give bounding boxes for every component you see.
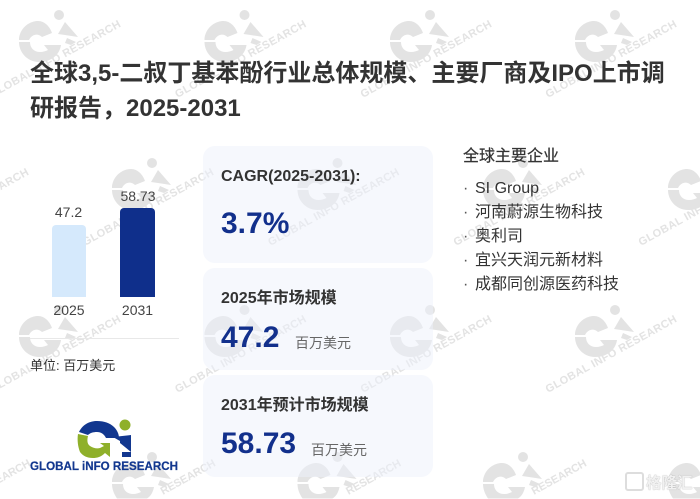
bar chart: [30, 188, 179, 339]
logo mark: blue arc: [79, 421, 119, 438]
list heading: 全球主要企业: [463, 148, 559, 165]
bar 2031: [120, 208, 155, 297]
company 2: ·: [463, 204, 468, 221]
logo text: GLOBAL iNFO RESEARCH: [30, 459, 178, 473]
watermark pattern: RESEARCH: [530, 458, 589, 498]
company 1: SI Group: [475, 180, 539, 197]
title: 全球3,5-二叔丁基苯酚行业总体规模、主要厂商及IPO上市调研报告，2025-2031: [30, 60, 665, 122]
watermark pattern: GLOBAL INFO RESEARCH: [359, 18, 494, 101]
CAGR value: 3.7%: [221, 207, 289, 240]
company 5: ·: [463, 276, 468, 293]
2031 unit: 百万美元: [311, 442, 367, 458]
panel: 2031 forecast market size: [203, 375, 433, 477]
watermark pattern: GLOBAL INFO RESEARCH: [266, 166, 401, 249]
value label 2025: 47.2: [55, 204, 82, 220]
source badge: 格隆汇: 格隆汇: [646, 475, 693, 492]
watermark pattern: GLOBAL INFO RESEARCH: [173, 18, 308, 101]
watermark pattern: GLOBAL INFO RESEARCH: [544, 18, 679, 101]
watermark pattern: GLOBAL INFO RESEARCH: [359, 313, 494, 396]
unit note: 单位: 百万美元: [30, 358, 115, 373]
company 4: ·: [463, 252, 468, 269]
watermark pattern: GLOBAL INFO RESEARCH: [544, 313, 679, 396]
company 4: 宜兴天润元新材料: [475, 252, 603, 269]
year label 2031: 2031: [122, 302, 153, 318]
logo: Global Info Research: [30, 420, 178, 473]
watermark pattern: RESEARCH: [344, 458, 403, 498]
company 3: ·: [463, 228, 468, 245]
panel: 2025 market size: [203, 268, 433, 370]
company 2: 河南蔚源生物科技: [475, 204, 603, 221]
CAGR label: CAGR(2025-2031):: [221, 168, 361, 185]
logo mark: green arc: [78, 434, 110, 458]
company list: [463, 147, 619, 293]
watermark pattern: RESEARCH: [159, 458, 218, 498]
2031 label: 2031年预计市场规模: [221, 397, 369, 414]
2025 unit: 百万美元: [295, 335, 351, 351]
company 3: 奥利司: [475, 228, 523, 245]
source badge: 格隆汇: [625, 472, 693, 492]
logo mark: i: [113, 435, 131, 457]
year label 2025: 2025: [53, 302, 85, 318]
2025 value: 47.2: [221, 321, 279, 354]
panel: CAGR: [203, 146, 433, 263]
company 5: 成都同创源医药科技: [475, 276, 619, 293]
watermark pattern: GLOBAL INFO RESEARCH: [81, 166, 216, 249]
value label 2031: 58.73: [120, 188, 156, 204]
bar 2025: [52, 225, 86, 297]
watermark pattern: GLOBAL INFO RESEARCH: [452, 166, 587, 249]
logo mark: dot: [120, 420, 130, 430]
company 1: ·: [463, 180, 468, 197]
watermark pattern: GLOBAL INFO RESEARCH: [173, 313, 308, 396]
2031 value: 58.73: [221, 427, 296, 460]
2025 label: 2025年市场规模: [221, 290, 337, 307]
